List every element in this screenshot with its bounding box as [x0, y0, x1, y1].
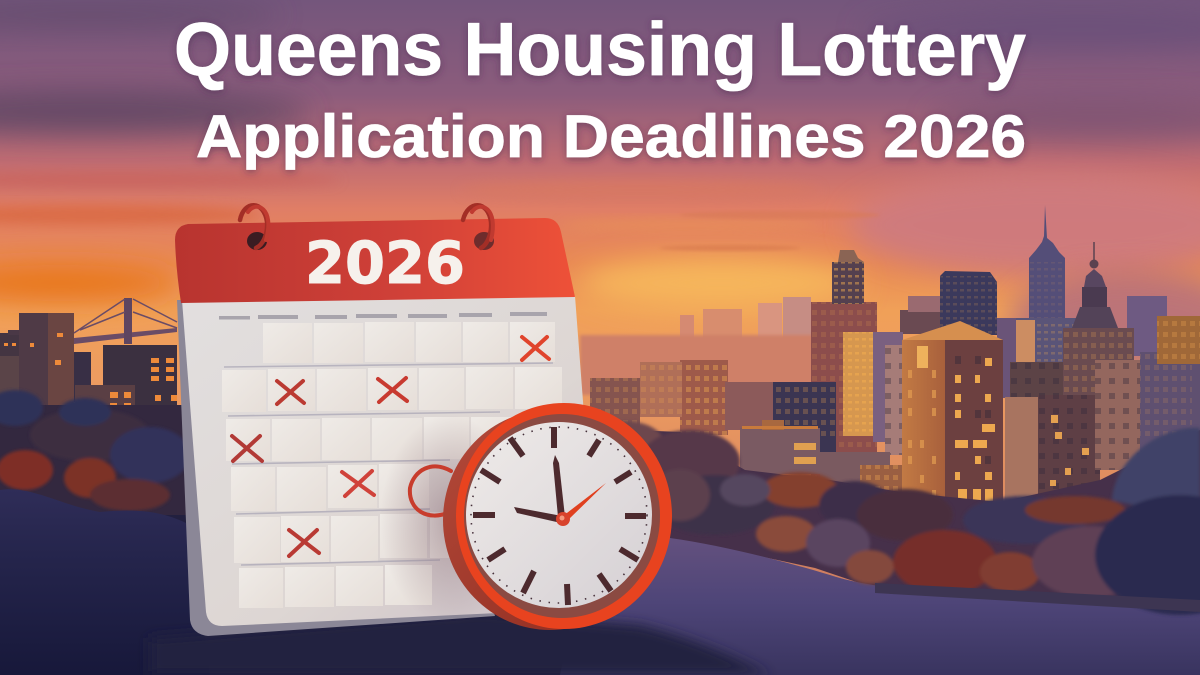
clock second hand [563, 483, 606, 521]
title line two: Application Deadlines 2026 [196, 103, 1026, 170]
calendar row rules [224, 363, 553, 565]
calendar red header [175, 218, 575, 303]
binding ring right [463, 205, 494, 250]
skyline: midtown towers [811, 205, 1078, 502]
clock minute hand [553, 455, 565, 517]
skyline: central highrise with lit windows [902, 321, 1003, 520]
left skyline with suspension bridge [0, 298, 177, 440]
clock hour ticks [473, 427, 646, 605]
river bank base beneath the trees [585, 428, 1200, 610]
weekday header dashes [219, 312, 547, 320]
clock hub [556, 512, 570, 526]
clock red rim [456, 403, 672, 629]
ground below calendar [150, 612, 770, 675]
title line one: Queens Housing Lottery [174, 7, 1026, 91]
year label: 2026 [305, 229, 465, 297]
clock face [466, 422, 652, 608]
binding ring left [240, 205, 268, 250]
panel: wall calendar [175, 205, 592, 636]
title [174, 7, 1026, 170]
calendar date grid [222, 322, 562, 608]
skyline: foreground apartment buildings [590, 316, 1200, 507]
left foreground trees [0, 390, 210, 675]
trees along the river bank [585, 421, 1200, 615]
icon: alarm clock [410, 403, 672, 630]
skyline: distant hazy buildings [580, 296, 1167, 395]
red X marks on dates [232, 337, 549, 556]
calendar paper sheet [182, 296, 592, 626]
soft clock shadow on calendar [380, 415, 520, 625]
skyline: domed church tower [1063, 242, 1134, 398]
river [560, 530, 1200, 675]
calendar back pages [177, 300, 495, 636]
clock hour hand [514, 507, 562, 523]
clock side loop [410, 466, 451, 516]
clock body [443, 410, 657, 630]
dark ground base behind calendar [160, 490, 620, 675]
